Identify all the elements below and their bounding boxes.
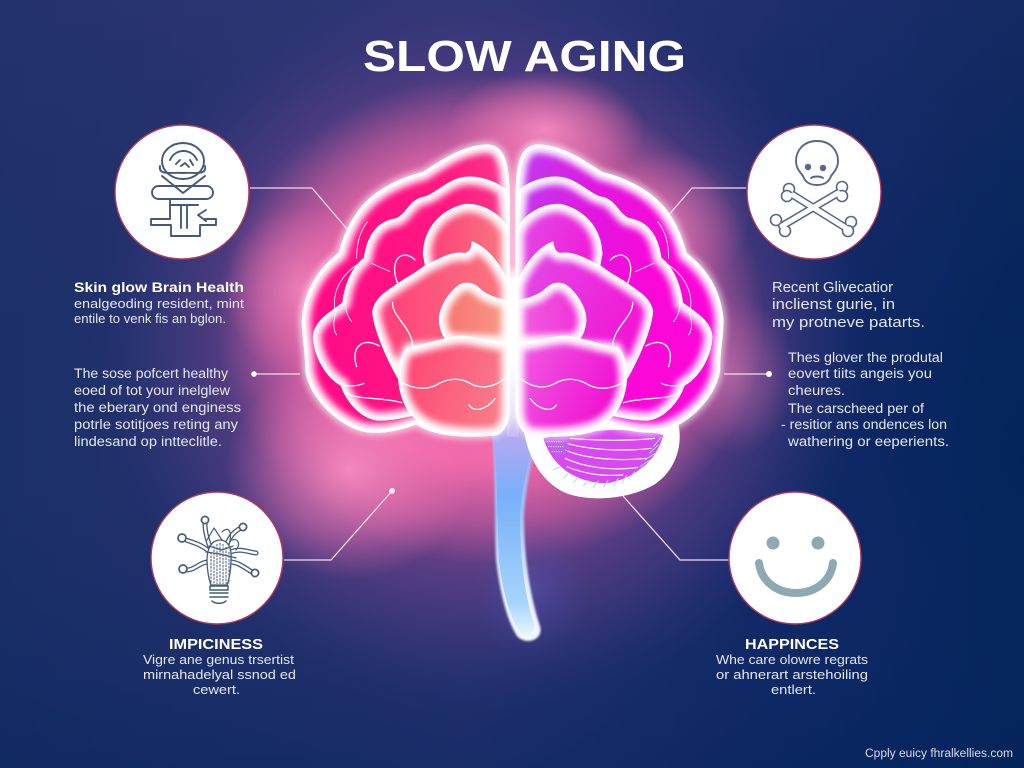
text block: impiciness: Vigre ane genus trsertist [143,652,294,667]
text block: right upper [772,280,925,331]
text block: impiciness: cewert. [193,682,240,697]
text block: right middle: - resitior ans ondences lon [781,417,947,432]
text block: happinces: or ahnerart arstehoiling [716,667,868,682]
panel: bottom-right icon circle [729,492,861,624]
text block: left middle: eoed of tot your inelglew [74,383,230,398]
brain stem [491,422,541,641]
text block: happinces: HAPPINCES [745,636,839,653]
text block: right upper: inclienst gurie, in [772,297,895,313]
brain [303,146,722,497]
text block: impiciness [143,636,296,697]
text block: right middle: cheures. [788,383,845,398]
text block: skin glow heading: enalgeoding resident, mint [74,297,245,311]
text block: right upper: my protneve patarts. [772,315,925,331]
text block: right middle: wathering or eeperients. [787,434,949,449]
panel: top-right icon circle [747,125,881,259]
text block: skin glow heading [74,279,245,326]
cerebellum [525,423,678,497]
text block: right middle: Thes glover the produtal [788,350,943,365]
text block: left middle: lindesand op intteclitle. [74,434,222,449]
connector lines [250,188,772,560]
left hemisphere [303,146,508,435]
text block: impiciness: mirnahadelyal ssnod ed [143,667,296,682]
text block: right middle: eovert tiits angeis you [788,366,932,381]
text block: skin glow heading: Skin glow Brain Health [74,279,244,295]
text block: impiciness: IMPICINESS [169,636,263,653]
text block: left middle: potrle sotitjoes reting any [74,417,238,432]
text block: left middle [74,366,241,449]
panel: bottom-left icon circle [151,492,283,624]
text block: right upper: Recent Glivecatior [772,280,893,296]
text block: happinces: Whe care olowre regrats [716,652,869,667]
title: SLOW AGING [363,32,686,81]
text block: right middle: The carscheed per of [788,401,924,416]
text block: left middle: the eberary ond enginess [74,400,241,415]
text block: skin glow heading: entile to venk fis an bglon. [74,312,226,326]
icon: smiley face [759,536,833,593]
icon: skull and crossbones [770,141,856,236]
icon: brain-root light bulb [178,516,259,603]
icon: seated figure [151,143,216,236]
text block: happinces [716,636,869,697]
footer credit: Cpply euicy fhralkellies.com [865,748,1013,760]
right hemisphere [517,146,722,435]
text block: right middle [781,350,949,449]
text block: left middle: The sose pofcert healthy [74,366,228,381]
text block: happinces: entlert. [771,682,816,697]
panel: top-left icon circle [115,125,249,259]
